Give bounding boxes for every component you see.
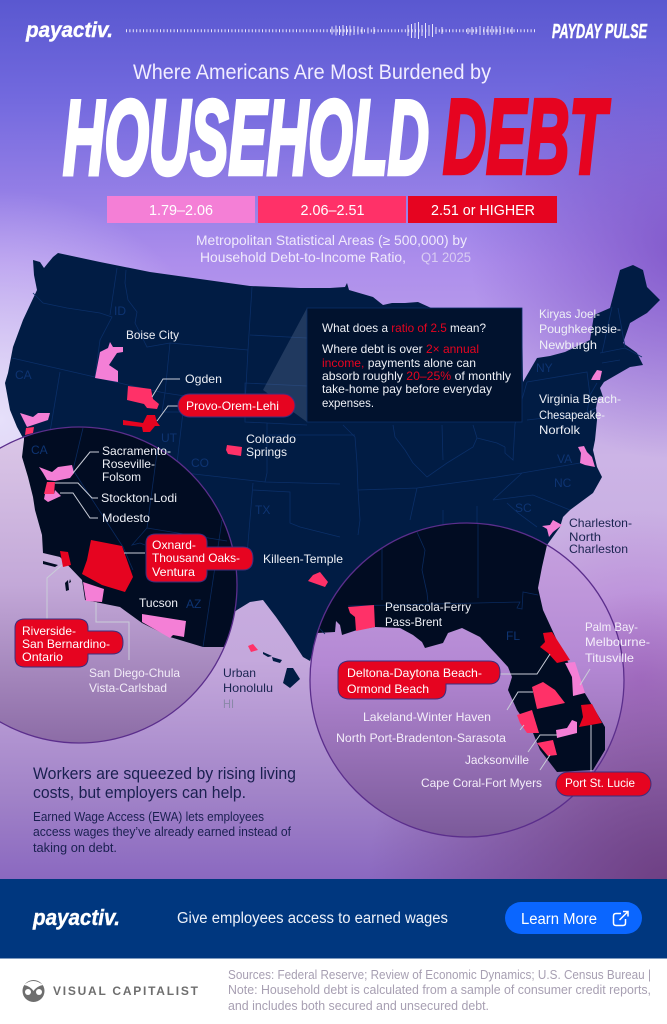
label: San Diego: [89, 666, 180, 695]
inset background: [310, 523, 624, 837]
Riverside inset shape: [82, 540, 133, 592]
label: San Diego: San Diego-Chula: [89, 666, 180, 680]
label: Charleston: [569, 516, 632, 556]
inset leader lines: [47, 452, 145, 660]
text block: employers: [33, 765, 296, 855]
Kiryas Joel region: [591, 370, 602, 380]
label: Virginia Beach: Virginia Beach-: [539, 392, 621, 406]
pill: Riverside: Ontario: [22, 650, 63, 664]
label: Urban Honolulu: Urban: [223, 666, 256, 680]
pill: Oxnard: Ventura: [152, 565, 195, 579]
North Port shape: [517, 710, 539, 733]
title: [63, 60, 611, 197]
label: Ogden: Ogden: [185, 372, 222, 386]
label: Virginia Beach: Chesapeake-: [539, 408, 605, 422]
label: Kiryas Joel: [539, 307, 621, 352]
label: Lakeland: Lakeland-Winter Haven: [363, 710, 491, 724]
sources note: [228, 968, 651, 1013]
label: Palm Bay: Palm Bay-: [585, 620, 638, 634]
label: Colorado Springs: Colorado: [246, 432, 296, 446]
label: Jacksonville: Jacksonville: [465, 753, 529, 767]
employers body: [33, 810, 292, 855]
state labels: CA: [15, 368, 32, 382]
inset state labels: UT: [161, 431, 178, 445]
legend: high: [408, 196, 557, 223]
label: San Diego: Vista-Carlsbad: [89, 681, 167, 695]
callout box: [307, 308, 522, 422]
label: Colorado Springs: [246, 432, 296, 459]
label: Pensacola: Pass-Brent: [385, 615, 443, 629]
icon: Visual Capitalist: [22, 980, 44, 1002]
pill: Provo-Orem-Lehi: Provo-Orem-Lehi: [186, 399, 279, 413]
pill: Oxnard: Thousand Oaks-: [152, 551, 240, 565]
Pensacola shape: [348, 605, 375, 631]
callout body: expenses.: [322, 396, 374, 410]
legend: low: 1.79–2.06: [149, 202, 213, 219]
Virginia Beach region: [578, 446, 595, 467]
pill: Deltona: [338, 661, 500, 699]
employers heading: Workers are squeezed by rising living: [33, 765, 296, 783]
banner logo: payactiv.: [32, 905, 120, 930]
banner background: [0, 879, 667, 958]
callout body: absorb roughly 20–25% of monthly: [322, 369, 511, 383]
label: Stockton-Lodi: Stockton-Lodi: [101, 491, 177, 505]
label: Pensacola: [385, 600, 471, 629]
map outline: [5, 253, 660, 661]
label: Palm Bay: [585, 620, 650, 665]
employers body: Earned Wage Access (EWA) lets employees: [33, 810, 264, 824]
sources note: and includes both secured and unsecured debt.: [228, 999, 489, 1013]
pill: Port St. Lucie: Port St. Lucie: [565, 776, 635, 790]
label: Tucson: Tucson: [139, 596, 178, 610]
callout body: [322, 342, 511, 410]
call-to-action banner: [0, 879, 667, 958]
employers heading: costs, but employers can help.: [33, 784, 246, 802]
pill: Port St. Lucie: [556, 772, 651, 796]
pill: Riverside: San Bernardino-: [22, 637, 110, 651]
legend: medium: [258, 196, 406, 223]
inset land: [318, 524, 605, 772]
US map: [5, 253, 660, 688]
pill: Deltona: Deltona-Daytona Beach-: [347, 666, 482, 680]
Port St. Lucie shape: [579, 704, 602, 727]
state labels: TX: [255, 503, 270, 517]
subtitle: Household Debt-to-Income Ratio,: [200, 250, 406, 265]
label: Charleston: Charleston: [569, 542, 628, 556]
inset state label: FL: [506, 629, 520, 643]
payactiv logo: payactiv.: [25, 19, 113, 42]
label: Urban Honolulu: Honolulu: [223, 681, 273, 695]
waveform divider: [126, 22, 536, 39]
Stockton inset shape: [44, 482, 55, 494]
label: Colorado Springs: Springs: [246, 445, 287, 459]
inset state labels: AZ: [186, 597, 201, 611]
label: Charleston: North: [569, 530, 601, 544]
inset state labels: CA: [31, 443, 48, 457]
pill: Deltona: Ormond Beach: [347, 682, 429, 696]
pill: Oxnard: Oxnard-: [152, 538, 196, 552]
inset land: [22, 428, 236, 647]
Cape Coral shape: [537, 740, 557, 756]
banner text: Give employees access to earned wages: [177, 910, 448, 927]
Honolulu region: [248, 644, 258, 652]
icon: external link: [614, 912, 628, 926]
callout: ratio explainer: [263, 308, 522, 422]
label: Virginia Beach: Norfolk: [539, 423, 581, 437]
Boise City region: [95, 342, 123, 382]
footer: [0, 958, 667, 1024]
label: Urban Honolulu: [223, 666, 273, 711]
label: Killeen-Temple: Killeen-Temple: [263, 552, 343, 566]
employers heading: [33, 765, 296, 802]
label: Sacramento: [102, 444, 171, 484]
label: Kiryas Joel: Poughkeepsie-: [539, 322, 621, 336]
state labels: NY: [536, 361, 553, 375]
legend: [107, 196, 557, 223]
inset state labels: [31, 431, 209, 611]
inset background: [0, 427, 237, 743]
inset leader lines: [500, 654, 591, 772]
San Diego inset shape: [83, 582, 104, 602]
legend: medium: 2.06–2.51: [300, 202, 364, 219]
label: Charleston: Charleston-: [569, 516, 632, 530]
callout body: Where debt is over 2× annual: [322, 342, 479, 356]
label: Kiryas Joel: Kiryas Joel-: [539, 307, 600, 321]
pill: Riverside: [15, 619, 123, 667]
label: Sacramento: Sacramento-: [102, 444, 171, 458]
employers body: access wages they’ve already earned instead of: [33, 825, 292, 839]
Tucson inset shape: [142, 614, 186, 638]
callout heading: What does a ratio of 2.5 mean?: [322, 321, 486, 335]
state labels: SC: [515, 501, 532, 515]
Hawaii islands: [263, 652, 300, 688]
Charleston region: [542, 520, 562, 537]
pill: Oxnard: [146, 534, 253, 582]
state labels: [15, 304, 572, 517]
label: Sacramento: Folsom: [102, 470, 141, 484]
pill: Provo-Orem-Lehi: [157, 394, 295, 421]
state borders: [12, 268, 642, 555]
pill: Riverside: Riverside-: [22, 624, 76, 638]
label: Sacramento: Roseville-: [102, 457, 155, 471]
label: Cape Coral: Cape Coral-Fort Myers: [421, 776, 542, 790]
Jacksonville shape: [556, 720, 577, 738]
state labels: VA: [557, 452, 572, 466]
Oxnard inset shape: [60, 551, 71, 567]
label: Kiryas Joel: Newburgh: [539, 338, 597, 352]
Provo region: [123, 415, 160, 432]
label: Pensacola: Pensacola-Ferry: [385, 600, 471, 614]
Colorado Springs region: [226, 445, 242, 456]
employers body: taking on debt.: [33, 841, 117, 855]
label: Modesto: Modesto: [102, 511, 150, 525]
outer Sacramento region: [20, 413, 50, 435]
legend: low: [107, 196, 255, 223]
Learn More button: Learn More: [521, 911, 597, 928]
subtitle: [196, 233, 471, 265]
legend: high: 2.51 or HIGHER: [431, 202, 535, 219]
Visual Capitalist logo: [22, 980, 199, 1002]
Lakeland shape: [532, 682, 565, 709]
Visual Capitalist logo: VISUAL CAPITALIST: [53, 984, 199, 998]
callout body: take-home pay before everyday: [322, 382, 492, 396]
sources note: Sources: Federal Reserve; Review of Economic Dynamics; U.S. Census Bureau |: [228, 968, 651, 982]
callout pointer: [263, 308, 307, 422]
inset circle: California and Southwest: [0, 420, 260, 743]
label: North Port: North Port-Bradenton-Sarasota: [336, 731, 506, 745]
state labels: ID: [114, 304, 126, 318]
inset circle outline: [0, 427, 237, 743]
Learn More button: [505, 902, 642, 934]
state labels: NC: [554, 476, 572, 490]
label: Virginia Beach: [539, 392, 621, 437]
sources note: Note: Household debt is calculated from a sample of consumer credit reports,: [228, 983, 651, 997]
inset circle: Florida and Southeast: [300, 500, 651, 837]
label: Palm Bay: Melbourne-: [585, 635, 650, 649]
Sacramento inset shape: [39, 465, 74, 481]
callout body: income, payments alone can: [322, 356, 476, 370]
label: Boise City: Boise City: [126, 328, 179, 342]
subtitle: Q1 2025: [421, 250, 471, 265]
label: Palm Bay: Titusville: [585, 651, 634, 665]
label: Urban Honolulu: HI: [223, 697, 234, 711]
Ogden region: [127, 386, 159, 409]
Modesto inset shape: [44, 490, 61, 502]
title: intro line: Where Americans Are Most Burdened by: [133, 60, 491, 84]
subtitle: Metropolitan Statistical Areas (≥ 500,000) by: [196, 233, 467, 248]
Deltona shape: [540, 632, 570, 663]
inset state labels: CO: [191, 456, 209, 470]
Killeen region: [308, 572, 328, 587]
Palm Bay shape: [565, 662, 585, 696]
label: Ogden: [152, 372, 222, 397]
inset circle outline: [310, 523, 624, 837]
